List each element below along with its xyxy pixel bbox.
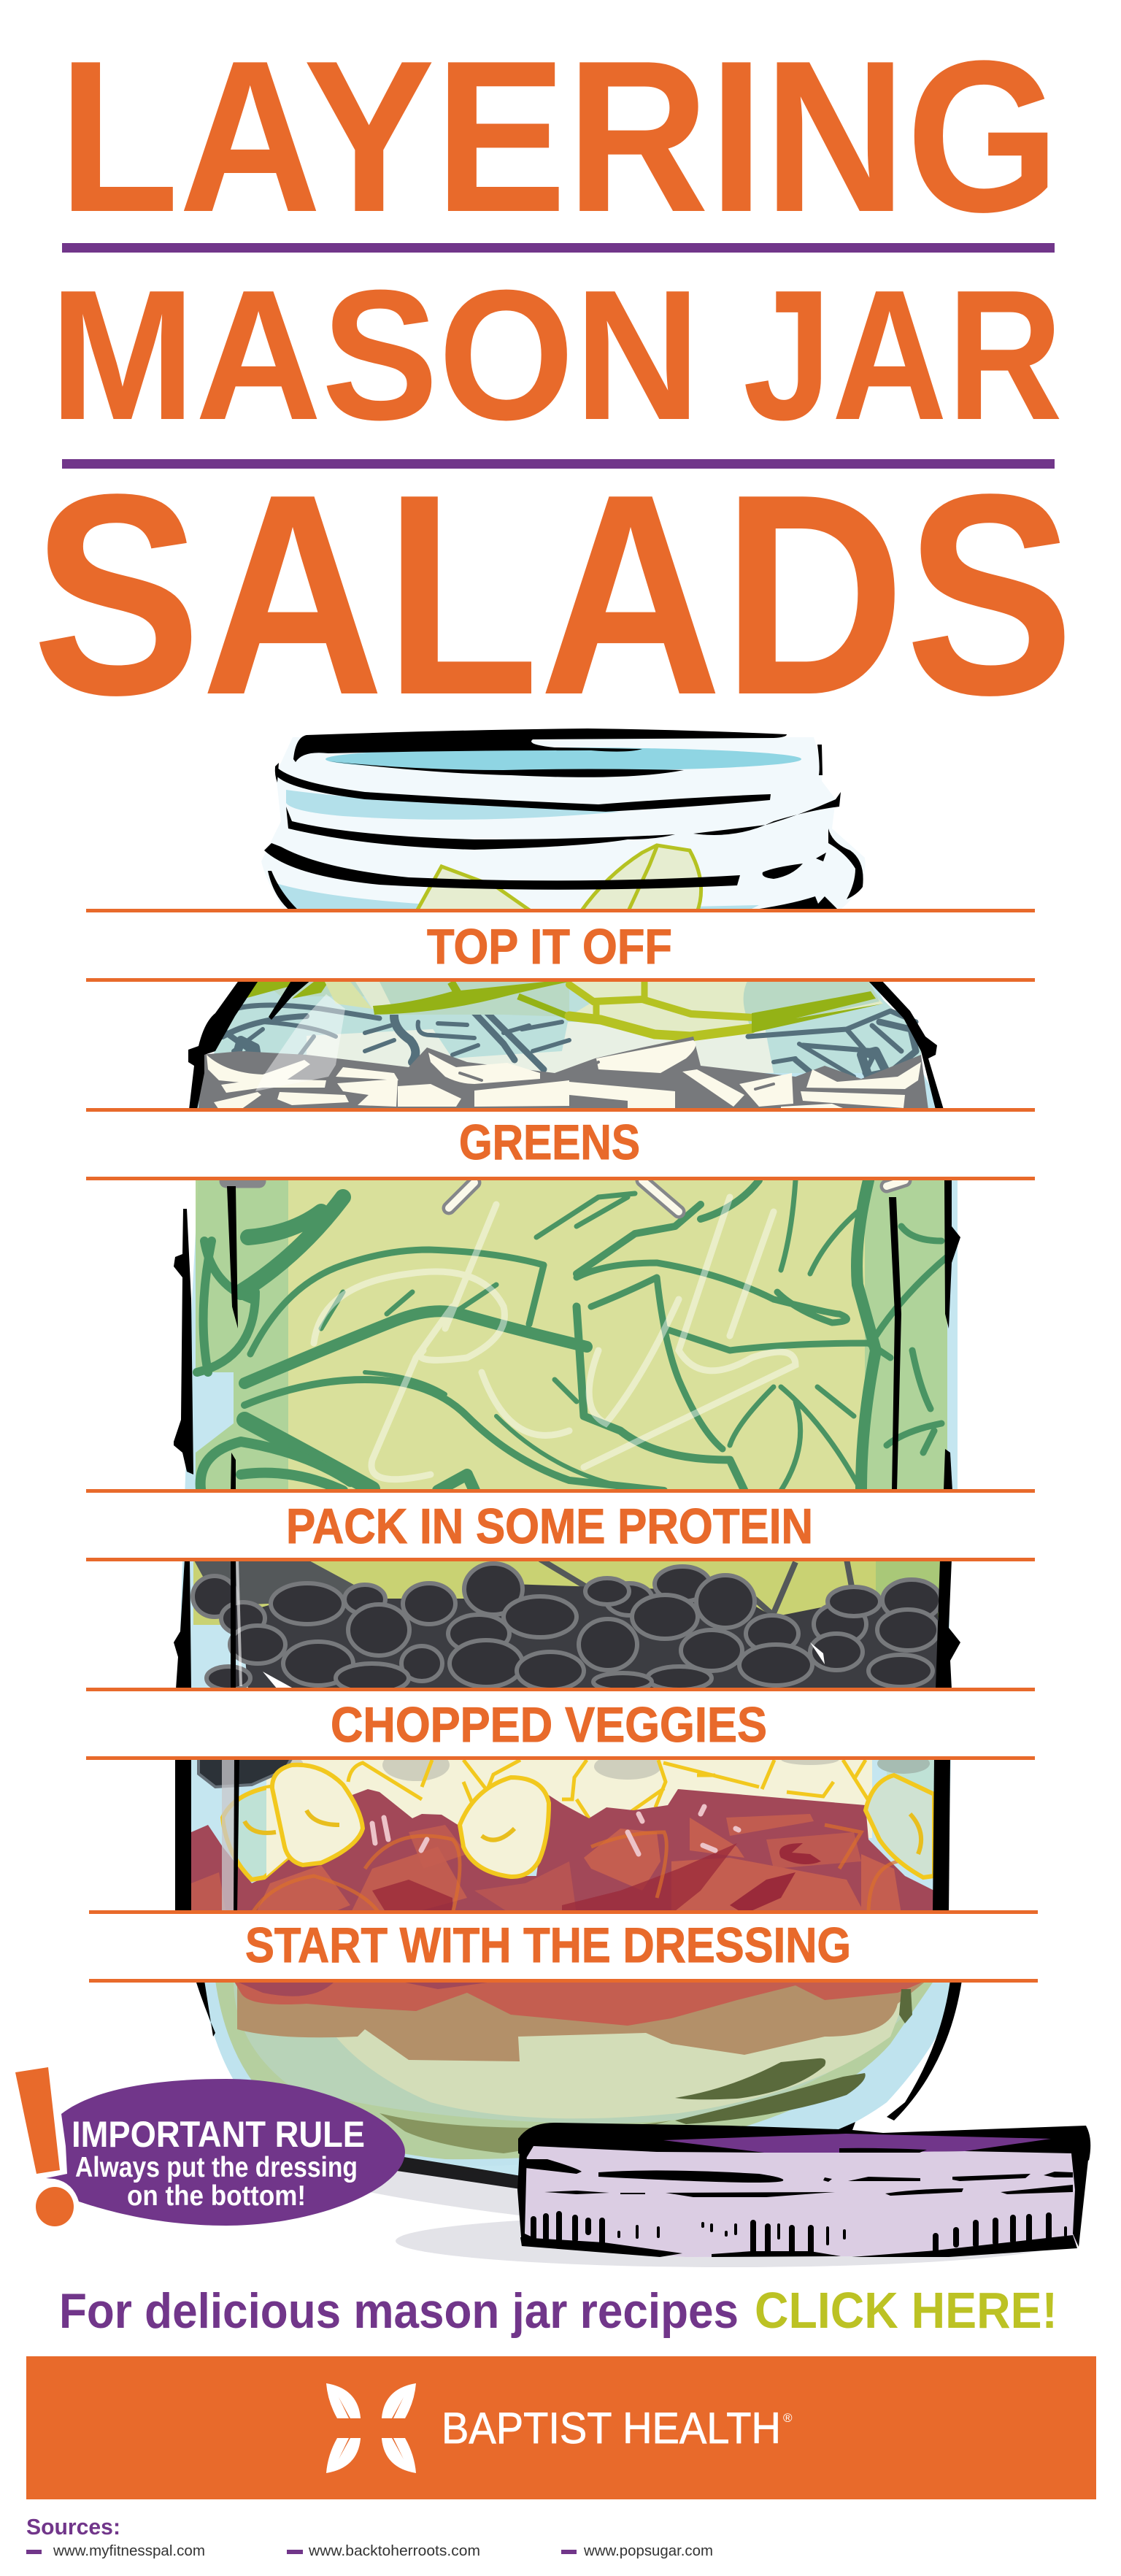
- step label: CHOPPED VEGGIES: [86, 1688, 1035, 1760]
- jar side lines: [174, 1209, 193, 1475]
- jar neck and threads: [261, 728, 865, 916]
- bean shadows at top: [274, 1749, 839, 1781]
- icon: Baptist Health leaf logo: [326, 2383, 416, 2473]
- teal leaf layer: [212, 985, 921, 1073]
- step label: PACK IN SOME PROTEIN: [86, 1489, 1035, 1561]
- tomato highlights: [372, 1807, 739, 1854]
- jar side lines: [174, 1559, 191, 1689]
- tomato bleed: [237, 1980, 927, 2061]
- sources: [26, 2514, 713, 2559]
- lid sides: [517, 2150, 1089, 2247]
- step label: PACK IN SOME PROTEIN: PACK IN SOME PROTEIN: [286, 1499, 813, 1554]
- jar side lines: [175, 1758, 191, 1914]
- white cabbage shreds fill: [207, 1040, 921, 1110]
- script embossing on tomatoes: [252, 1825, 898, 1914]
- callout bubble: [46, 2079, 405, 2226]
- illustration: mason jar: [174, 728, 1090, 2267]
- jar bottom outline: [196, 1980, 215, 2037]
- dark base under the beans: [241, 1584, 938, 1689]
- cabbage shadow marks: [460, 1062, 774, 1089]
- spinach veins: [197, 1180, 949, 1491]
- icon: exclamation mark: [15, 2067, 74, 2226]
- step label: TOP IT OFF: TOP IT OFF: [427, 919, 672, 974]
- title line: JAR: JAR: [743, 251, 1063, 458]
- registered mark: ®: [783, 2411, 793, 2425]
- layer: cucumber topping and cabbage: [188, 980, 944, 1110]
- cucumber slices: [263, 982, 569, 1017]
- layer: black beans: [174, 1559, 960, 1693]
- call to action: For delicious mason jar recipes: [59, 2283, 739, 2339]
- dressing herb flecks: [675, 1989, 912, 2124]
- corn kernel outlines: [348, 1760, 868, 1818]
- bean pile: [193, 1564, 941, 1693]
- callout: important rule: [15, 2067, 405, 2226]
- layer: spinach greens: [174, 1178, 960, 1493]
- callout heading: IMPORTANT RULE: [72, 2114, 365, 2155]
- step label: GREENS: GREENS: [459, 1115, 640, 1170]
- step label: START WITH THE DRESSING: START WITH THE DRESSING: [245, 1918, 851, 1973]
- step label: START WITH THE DRESSING: [89, 1910, 1038, 1983]
- ground shadow: [358, 2166, 1064, 2267]
- sources: Sources:: [26, 2514, 120, 2540]
- dark bean at jar edge: [199, 1758, 292, 1787]
- embossed jar script: [314, 1197, 796, 1480]
- source three: www.popsugar.com: [583, 2543, 713, 2559]
- tomato flesh: [191, 1814, 901, 1914]
- title line: MASON: MASON: [50, 251, 701, 458]
- callout text: Always put the dressing: [75, 2152, 358, 2183]
- title: [32, 15, 1074, 755]
- source two: www.backtoherroots.com: [308, 2543, 480, 2559]
- corn kernels: [223, 1765, 934, 1880]
- lid base edges: [520, 2235, 1077, 2257]
- step label: TOP IT OFF: [86, 909, 1035, 982]
- layer: chopped corn and tomatoes: [175, 1749, 950, 1914]
- layer: dressing base of jar: [196, 1980, 962, 2190]
- lid top rim: [518, 2122, 1090, 2161]
- cucumber slices in neck: [416, 845, 701, 912]
- lid grip teeth: [533, 2214, 1066, 2252]
- step label: GREENS: [86, 1108, 1035, 1180]
- logotype: BAPTIST HEALTH: [442, 2404, 781, 2453]
- jar shoulder outline: [188, 980, 259, 1110]
- jar lid: [517, 2122, 1090, 2257]
- tomato mass: [191, 1789, 934, 1914]
- footer banner: [26, 2356, 1096, 2499]
- jar glass body: [177, 980, 962, 2179]
- shreds falling into greens: [226, 1180, 905, 1212]
- source one: www.myfitnesspal.com: [53, 2543, 205, 2559]
- link text: click here: CLICK HERE!: [755, 2282, 1058, 2339]
- white cabbage shreds outline: [199, 1037, 928, 1110]
- callout text line two: on the bottom!: [127, 2180, 306, 2212]
- lid body: [524, 2142, 1076, 2257]
- step label: CHOPPED VEGGIES: CHOPPED VEGGIES: [331, 1697, 767, 1753]
- lid dashes: [525, 2159, 1073, 2197]
